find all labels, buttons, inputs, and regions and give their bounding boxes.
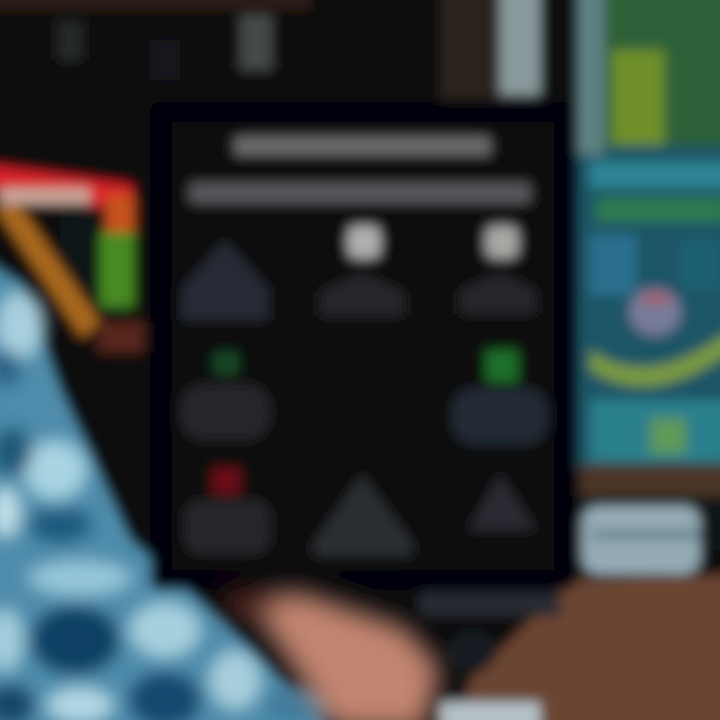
wooden desk	[420, 574, 720, 720]
shelf and white object at right	[580, 464, 720, 574]
item row 3	[184, 468, 536, 556]
grid of nine blurred items	[180, 226, 548, 556]
colourful shape at left: red, orange and green frame	[0, 165, 144, 352]
phone screen	[180, 137, 548, 556]
blue patterned shirt	[0, 250, 540, 720]
phone body	[150, 102, 575, 590]
item row 2	[180, 350, 548, 444]
item row 1	[182, 226, 536, 320]
heading: blurred text lines	[190, 137, 530, 203]
poster on the right wall	[578, 0, 720, 470]
hand holding phone	[222, 592, 440, 720]
